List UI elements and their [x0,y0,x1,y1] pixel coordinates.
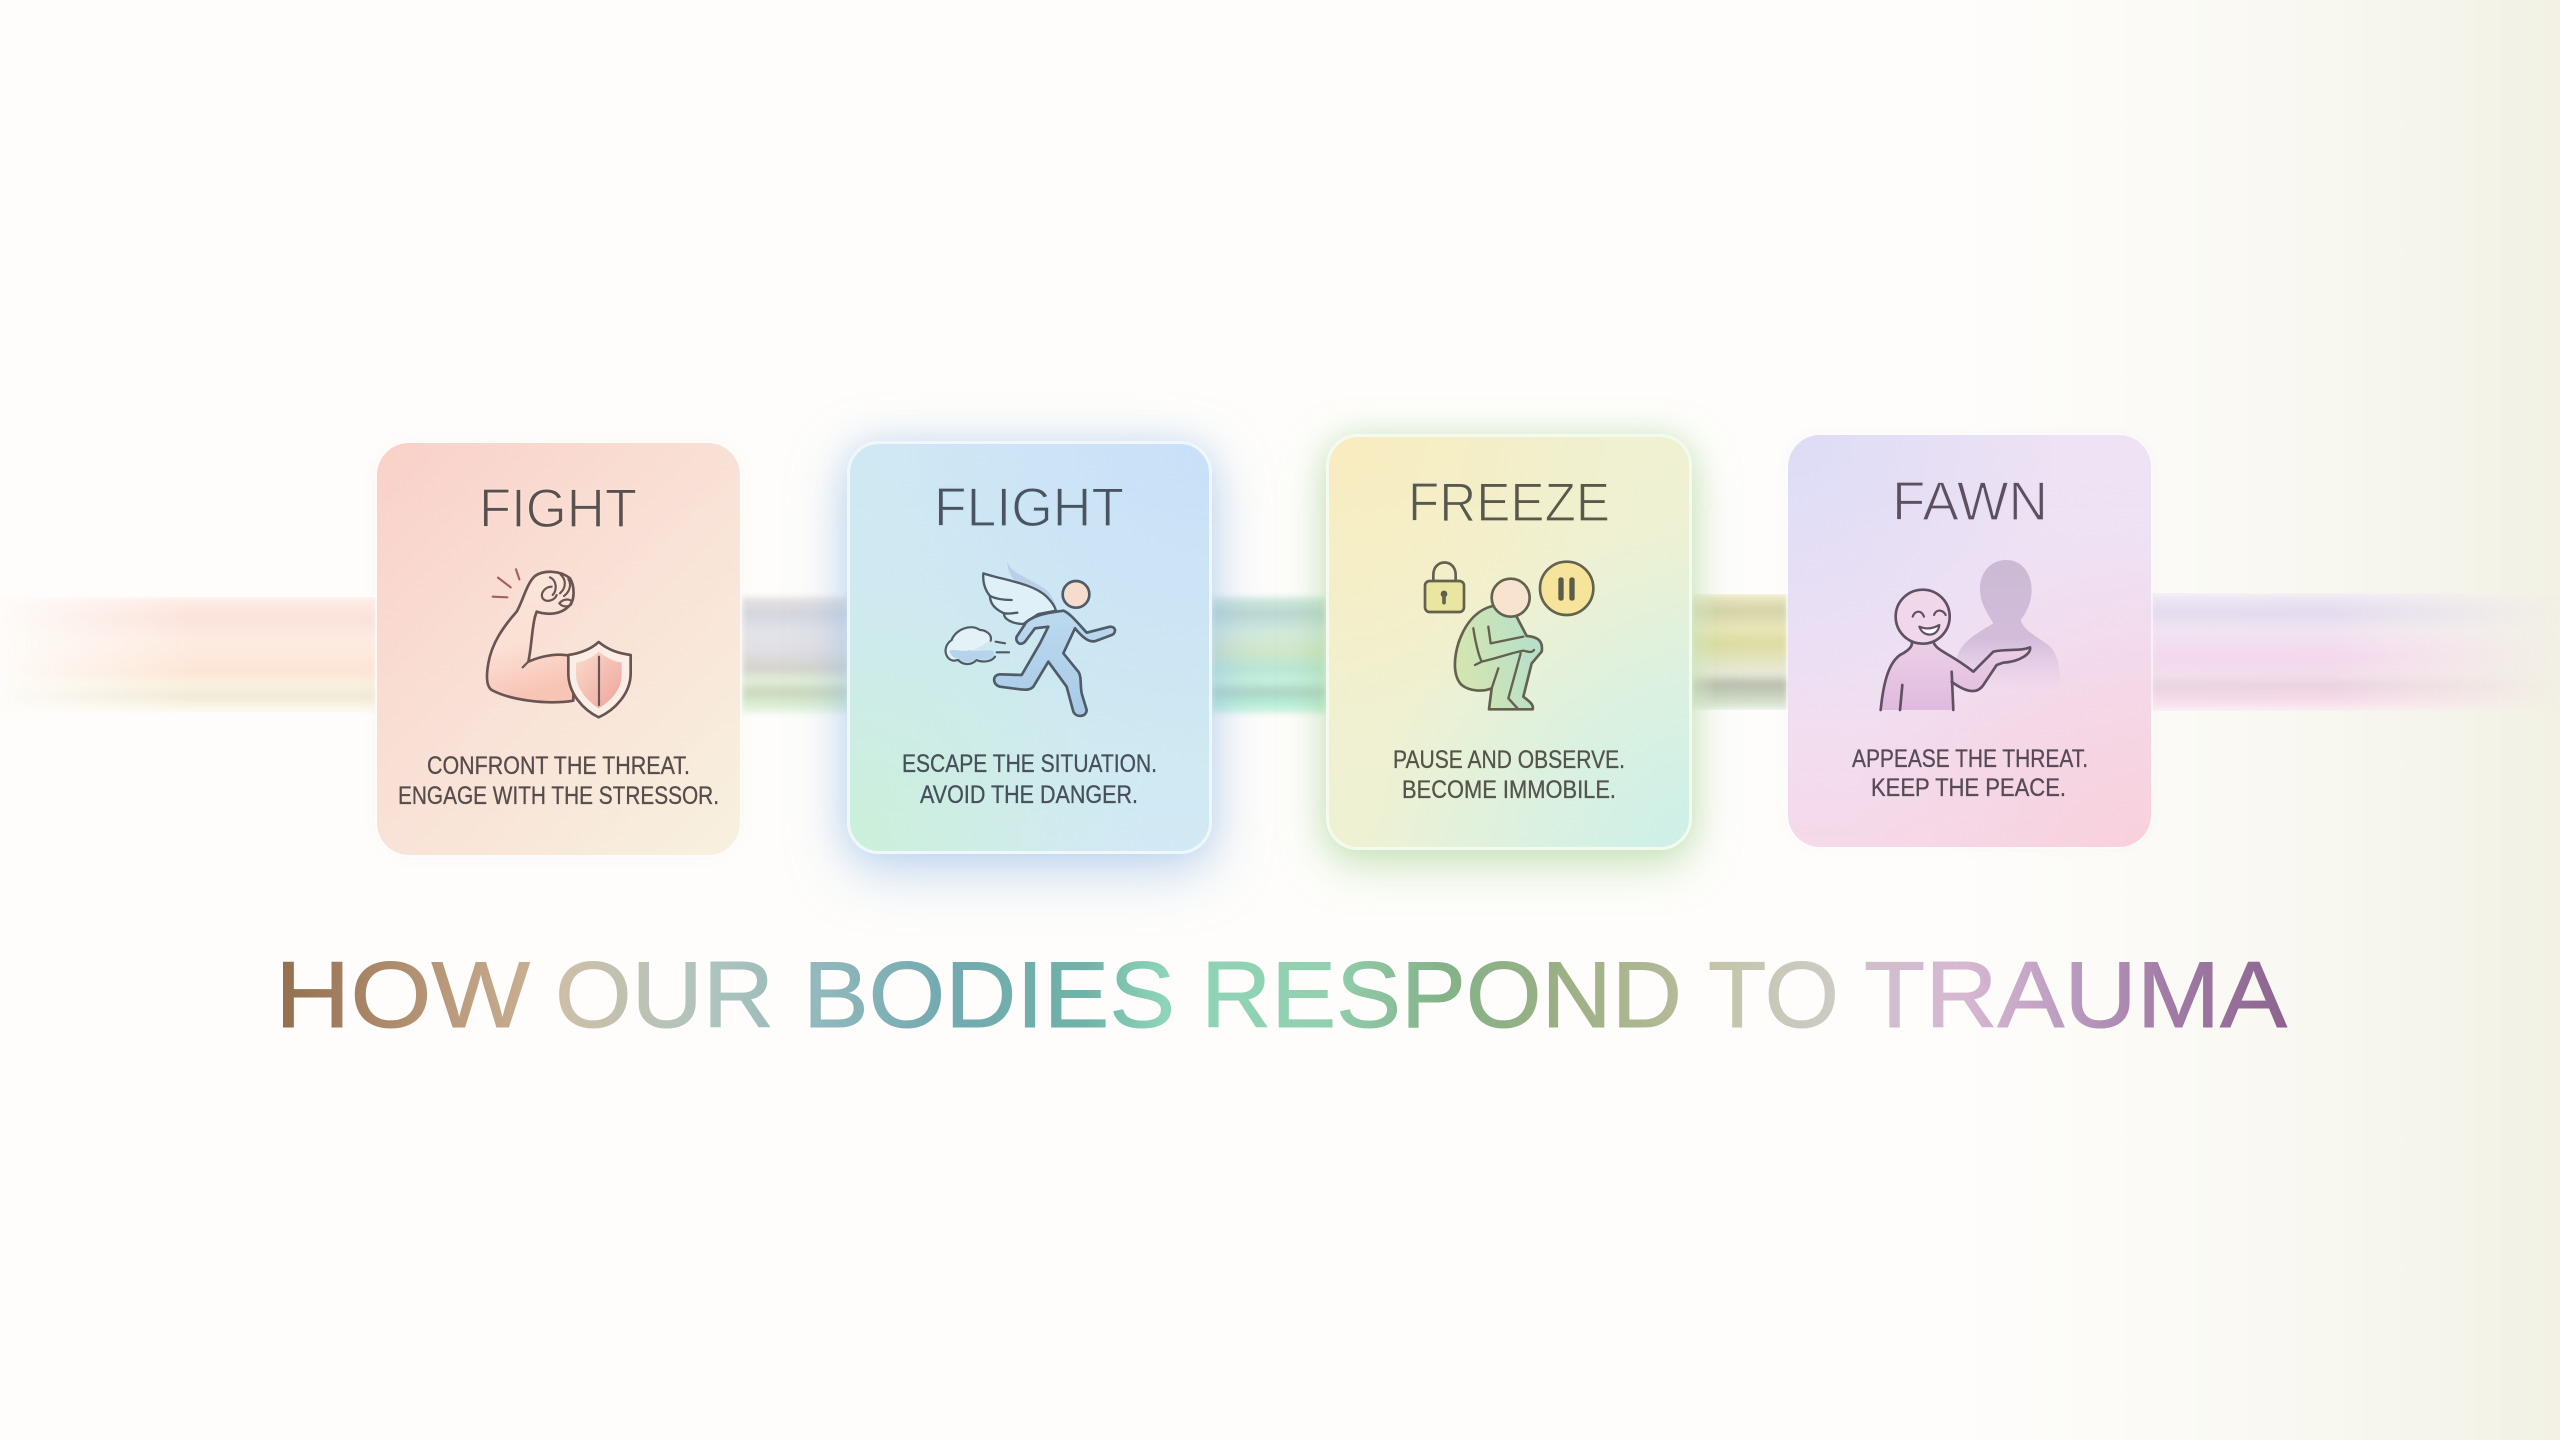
description: fawn [1852,745,2088,802]
icon: crouching figure with lock and pause [1425,562,1593,709]
panel: fight [377,443,740,855]
band: freeze to fawn ribbon [1692,594,1788,710]
panel: fawn [1788,435,2151,847]
description: freeze: BECOME IMMOBILE. [1402,776,1616,804]
description: fight: CONFRONT THE THREAT. [427,752,690,780]
panel: flight [847,441,1212,854]
icon part: person body [1881,642,2030,710]
icon part: person head [1896,590,1950,644]
icon: running figure with wing and cloud [946,562,1115,716]
title: OUR [555,942,774,1047]
icon part: dust cloud [946,627,995,664]
description: freeze [1393,746,1625,804]
description: fawn: KEEP THE PEACE. [1871,774,2066,802]
icon part: shadow figure [1957,560,2061,690]
panel: freeze [1326,434,1692,850]
description: fight [398,752,719,810]
description: freeze: PAUSE AND OBSERVE. [1393,746,1625,774]
icon part: body [1455,606,1542,709]
heading: freeze: FREEZE [1408,471,1610,533]
icon part: wing [983,573,1056,624]
description: flight [902,750,1157,809]
title: TO [1708,942,1839,1047]
band: left ribbon into fight [0,597,377,713]
band: right ribbon out of fawn [2151,593,2509,711]
icon part: pause symbol [1540,562,1593,615]
title: TRAUMA [1864,942,2287,1047]
band: fight to flight ribbon [742,597,848,713]
title: HOW [275,942,530,1047]
icon part: shield [568,642,631,717]
icon part: head [1492,579,1530,617]
heading: fawn: FAWN [1892,470,2048,532]
description: fawn: APPEASE THE THREAT. [1852,745,2088,773]
heading: fight: FIGHT [479,477,637,539]
icon part: head [1063,581,1089,608]
description: flight: ESCAPE THE SITUATION. [902,750,1157,778]
icon part: padlock [1425,562,1464,612]
icon part: arm [487,572,574,702]
icon part: back wing [1007,562,1057,612]
title: RESPOND [1201,942,1682,1047]
description: flight: AVOID THE DANGER. [920,781,1138,809]
icon: flexed arm and shield [487,569,631,717]
title: BODIES [803,942,1175,1047]
heading: flight: FLIGHT [934,476,1124,538]
icon part: body [994,611,1115,716]
band: flight to freeze ribbon [1212,597,1326,713]
icon: smiling person and looming shadow [1881,560,2061,710]
icon part: impact sparks [493,569,519,597]
